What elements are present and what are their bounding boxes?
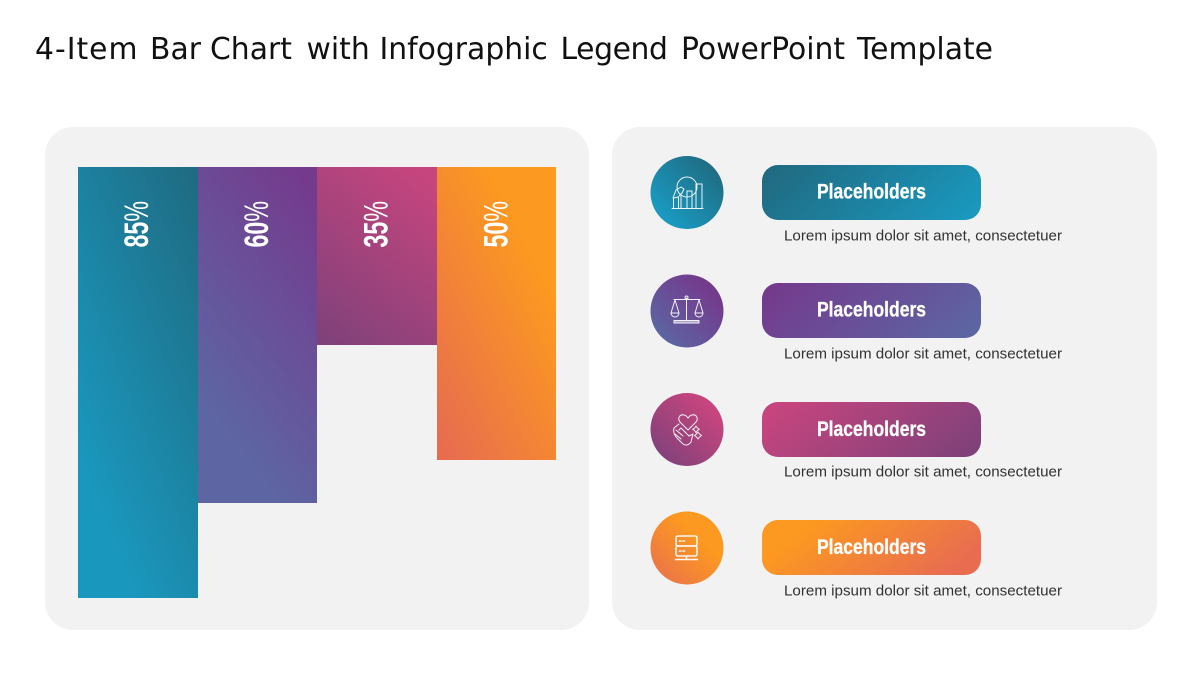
description: Lorem ipsum dolor sit amet, consectetuer <box>784 346 1062 362</box>
label pill: Placeholders <box>817 536 926 559</box>
title: Legend <box>560 32 668 67</box>
title: 4-Item <box>35 32 139 67</box>
legend item 1 <box>650 156 1062 244</box>
label pill <box>762 283 981 338</box>
label pill: Placeholders <box>817 418 926 441</box>
label pill <box>762 165 981 220</box>
icon: server <box>650 512 724 584</box>
bar: 35% <box>317 167 437 345</box>
title: Infographic <box>380 32 548 67</box>
icon: hand with heart <box>650 393 724 466</box>
title: Chart <box>210 32 292 67</box>
legend item 4 <box>650 512 1062 600</box>
title: Template <box>856 32 993 67</box>
panel: legend <box>612 127 1157 630</box>
label pill: Placeholders <box>817 180 926 204</box>
bar: 50% <box>437 167 556 460</box>
label pill <box>762 520 981 575</box>
bar: 35%: 35% <box>358 201 396 248</box>
title: with <box>306 32 370 67</box>
description: Lorem ipsum dolor sit amet, consectetuer <box>784 464 1062 480</box>
label pill: Placeholders <box>817 298 926 322</box>
bar: 50%: 50% <box>478 201 516 248</box>
description: Lorem ipsum dolor sit amet, consectetuer <box>784 584 1062 600</box>
icon: analytics chart with magnifier <box>650 156 724 229</box>
label pill <box>762 402 981 457</box>
bar: 60%: 60% <box>238 201 276 248</box>
bar: 85% <box>78 167 198 598</box>
legend item 2 <box>650 274 1062 362</box>
description: Lorem ipsum dolor sit amet, consectetuer <box>784 228 1062 244</box>
title: Bar <box>150 32 202 67</box>
legend item 3 <box>650 393 1062 480</box>
bar: 60% <box>198 167 317 503</box>
icon: balance scale <box>650 274 724 348</box>
title: PowerPoint <box>681 32 845 67</box>
bar: 85%: 85% <box>118 201 156 248</box>
panel: bar chart <box>45 127 589 630</box>
